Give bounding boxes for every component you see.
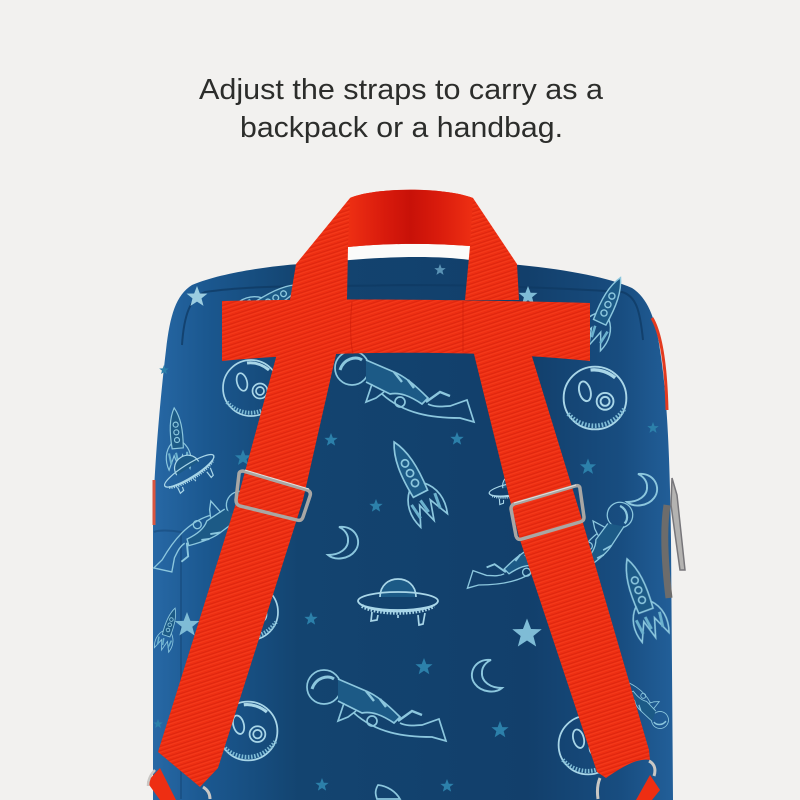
heading: backpack or a handbag. [240, 112, 563, 144]
left lower strap [158, 350, 337, 787]
top seam and inner panel edge [182, 285, 643, 345]
left slider buckle [236, 470, 310, 520]
pattern: crescent moons [328, 474, 657, 691]
backpack body [153, 257, 673, 800]
keeper stitch lines [351, 301, 463, 354]
horizontal strap keeper [222, 300, 590, 361]
pattern: astronauts [154, 351, 677, 741]
pattern: stars [153, 264, 659, 792]
lower left strap loop and ring [147, 768, 210, 800]
pattern: rockets [153, 271, 671, 799]
lower right strap loop and ring [597, 761, 660, 800]
zipper pull [665, 478, 685, 598]
pattern: flying saucers [156, 442, 543, 625]
pattern: planets [219, 360, 626, 774]
handle and upper straps [290, 190, 519, 300]
backpack [147, 190, 685, 800]
right slider buckle [511, 485, 584, 539]
side zips [652, 318, 667, 410]
heading [199, 74, 603, 144]
white gap behind handle [345, 244, 473, 264]
side pocket seam [154, 530, 181, 799]
right lower strap [473, 350, 650, 778]
heading: Adjust the straps to carry as a [199, 74, 603, 106]
